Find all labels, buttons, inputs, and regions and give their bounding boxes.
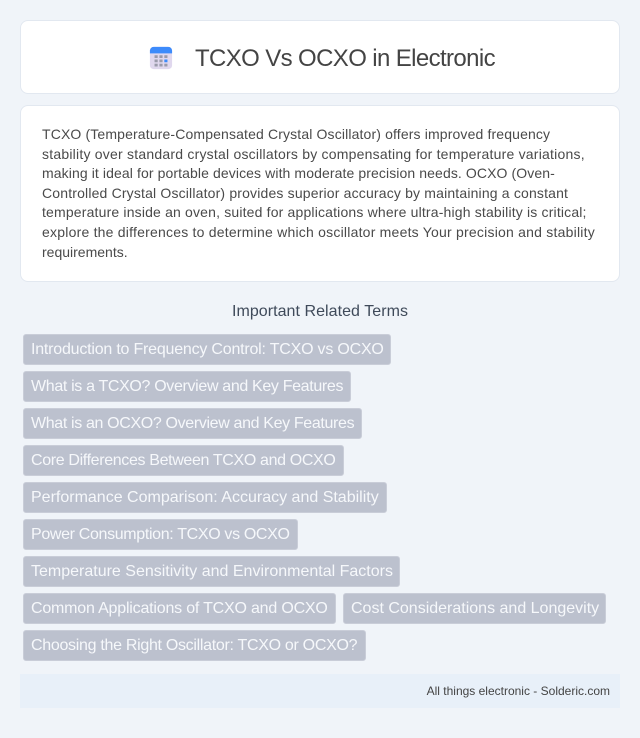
icon: calendar bbox=[150, 46, 172, 70]
tag 5 bbox=[23, 482, 387, 513]
text block: description: explore the differences to determine which oscillator meets Your precision and stability bbox=[42, 224, 595, 240]
tag 4: Core Differences Between TCXO and OCXO bbox=[31, 452, 335, 469]
tag 3: What is an OCXO? Overview and Key Features bbox=[31, 415, 354, 432]
tag 7 bbox=[23, 556, 400, 587]
tag 3 bbox=[23, 408, 362, 439]
text block: description: requirements. bbox=[42, 244, 128, 260]
text block: description bbox=[42, 126, 595, 260]
tag 2 bbox=[23, 371, 351, 402]
tag 6 bbox=[23, 519, 298, 550]
tag 6: Power Consumption: TCXO vs OCXO bbox=[31, 526, 290, 543]
tag 10: Choosing the Right Oscillator: TCXO or OCXO? bbox=[31, 637, 357, 654]
tag 4 bbox=[23, 445, 344, 476]
text block: description: temperature inside an oven, suited for applications where ultra-high stability is critical; bbox=[42, 204, 587, 220]
heading: related terms: Important Related Terms bbox=[232, 303, 408, 320]
tag 9: Cost Considerations and Longevity bbox=[351, 600, 599, 617]
tag 8 bbox=[23, 593, 336, 624]
text block: description: Controlled Crystal Oscillator) provides superior accuracy by maintaining a constant bbox=[42, 185, 568, 201]
text block: description: making it ideal for portable devices with moderate precision needs. OCXO (Oven- bbox=[42, 165, 555, 181]
tag 8: Common Applications of TCXO and OCXO bbox=[31, 600, 328, 617]
footer bbox=[20, 674, 620, 708]
tag 1: Introduction to Frequency Control: TCXO vs OCXO bbox=[31, 341, 384, 358]
footer text: All things electronic - Solderic.com bbox=[427, 684, 610, 698]
panel: description bbox=[20, 105, 620, 282]
panel: header bbox=[20, 20, 620, 94]
tag 10 bbox=[23, 630, 366, 661]
tag 1 bbox=[23, 334, 391, 365]
text block: description: stability over standard crystal oscillators by compensating for temperature variations, bbox=[42, 146, 585, 162]
tag 2: What is a TCXO? Overview and Key Features bbox=[31, 378, 343, 395]
tag 7: Temperature Sensitivity and Environmental Factors bbox=[31, 563, 393, 580]
tag 5: Performance Comparison: Accuracy and Stability bbox=[31, 489, 379, 506]
tag 9 bbox=[343, 593, 606, 624]
title: TCXO Vs OCXO in Electronic bbox=[195, 45, 495, 72]
text block: description: TCXO (Temperature-Compensated Crystal Oscillator) offers improved frequency bbox=[42, 126, 550, 142]
